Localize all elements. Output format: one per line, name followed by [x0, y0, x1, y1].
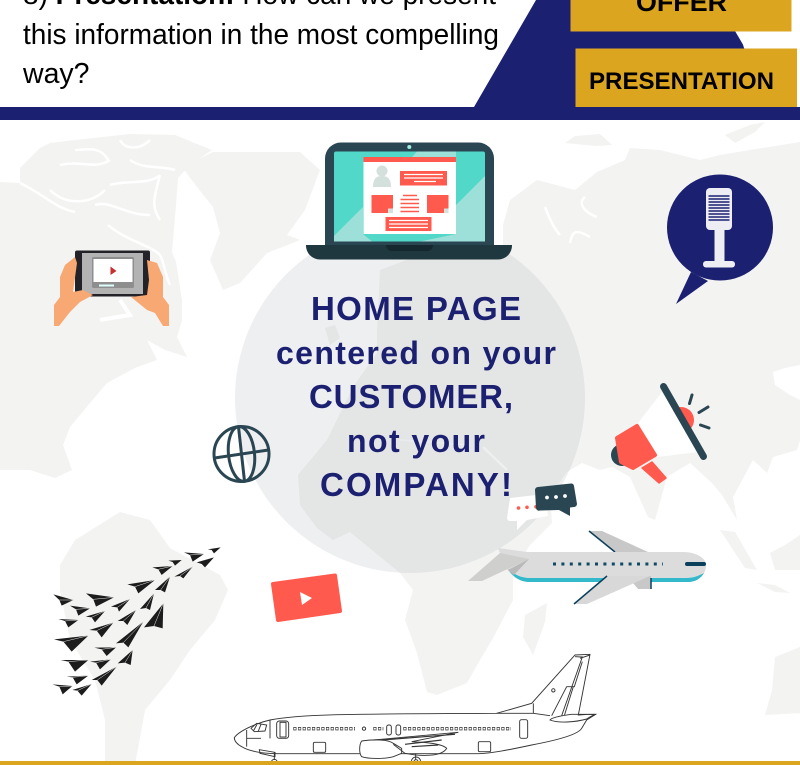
icon: laptop with home page — [306, 142, 512, 260]
headline: home page centered on your customer: centered on your — [276, 335, 556, 371]
icon: globe — [214, 425, 269, 483]
navy divider bar — [0, 107, 800, 120]
headline: home page centered on your customer: not your — [347, 423, 485, 459]
icon: hands holding tablet video — [54, 250, 169, 326]
headline: home page centered on your customer: CUSTOMER, — [309, 378, 513, 415]
icon: megaphone — [611, 386, 709, 483]
intro text: presentation question: this information in the most compelling — [23, 19, 499, 51]
headline: home page centered on your customer: COMPANY! — [320, 466, 512, 503]
intro text: presentation question: way? — [22, 58, 90, 90]
pyramid level: presentation — [576, 48, 797, 107]
icon: flock of paper planes — [52, 547, 221, 696]
intro text: presentation question — [22, 0, 499, 90]
gold footer line — [0, 761, 800, 765]
pyramid level: offer — [570, 0, 792, 32]
icon: microphone speech bubble — [667, 174, 773, 304]
pyramid level: presentation: PRESENTATION — [589, 68, 774, 95]
headline: home page centered on your customer: HOME PAGE — [311, 290, 521, 327]
pyramid diagram — [474, 0, 800, 107]
icon: colored airplane — [468, 531, 706, 604]
icon: airliner line drawing — [234, 654, 596, 765]
icon: youtube play card — [273, 576, 340, 620]
headline: home page centered on your customer — [276, 290, 556, 503]
icon: chat bubbles — [507, 483, 577, 530]
web page window — [364, 157, 456, 234]
central circle behind headline — [235, 223, 585, 573]
